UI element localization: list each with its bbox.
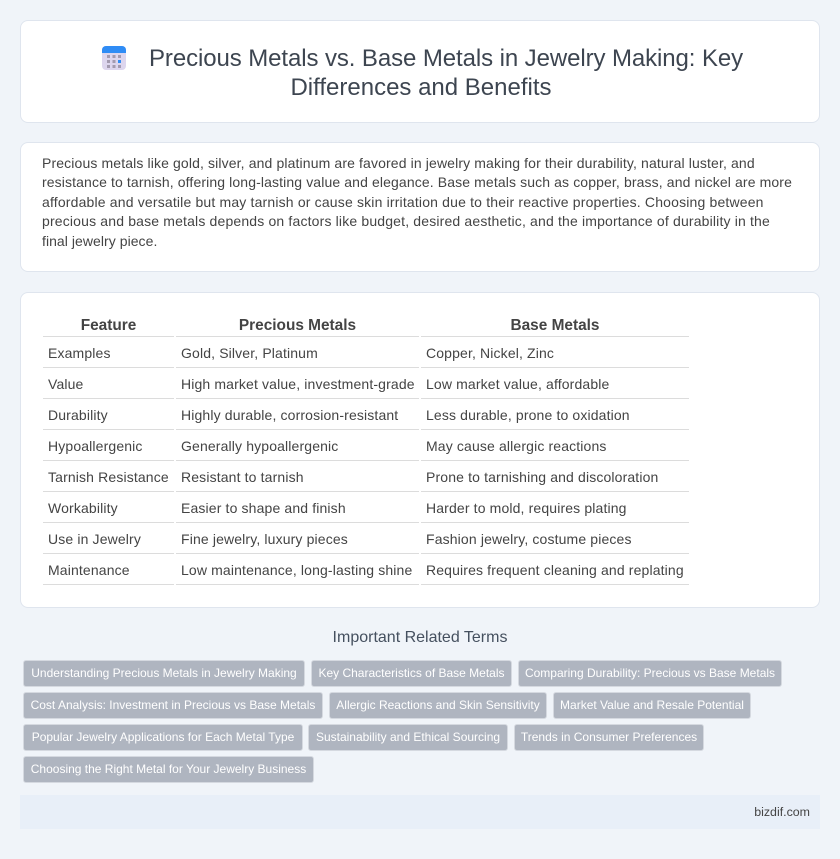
text block: introduction: affordable and versatile but may tarnish or cause skin irritation due to their reactive properties. Choosing between — [42, 194, 764, 210]
table: feature comparison: Fashion jewelry, costume pieces — [426, 531, 632, 547]
table: feature comparison: Less durable, prone to oxidation — [426, 407, 630, 423]
table: feature comparison: Use in Jewelry — [48, 531, 141, 547]
table: feature comparison: Durability — [48, 407, 108, 423]
text block: introduction: Precious metals like gold, silver, and platinum are favored in jewelry making for their durability, natural luster, and — [42, 155, 755, 171]
table: feature comparison: Workability — [48, 500, 118, 516]
table: feature comparison: Resistant to tarnish — [181, 469, 304, 485]
table: feature comparison: Generally hypoallergenic — [181, 438, 338, 454]
table: feature comparison: May cause allergic reactions — [426, 438, 607, 454]
tags: related terms: Popular Jewelry Applications for Each Metal Type — [32, 730, 294, 744]
text block: introduction: precious and base metals depends on factors like budget, desired aesthetic, and the importance of durability in the — [42, 213, 770, 229]
table: feature comparison: Low market value, affordable — [426, 376, 609, 392]
table: feature comparison: Maintenance — [48, 562, 130, 578]
tags: related terms: Comparing Durability: Precious vs Base Metals — [525, 666, 775, 680]
table: feature comparison: Feature — [81, 317, 136, 334]
icon: calendar — [102, 46, 126, 70]
table: feature comparison: Precious Metals — [239, 317, 356, 334]
title: Differences and Benefits — [290, 74, 552, 101]
tags: related terms — [23, 660, 782, 783]
title — [149, 45, 743, 101]
panel: title card — [20, 20, 820, 123]
table: feature comparison — [43, 317, 689, 585]
table: feature comparison: Highly durable, corrosion-resistant — [181, 407, 398, 423]
table: feature comparison: Easier to shape and finish — [181, 500, 346, 516]
table: feature comparison: Copper, Nickel, Zinc — [426, 345, 554, 361]
tags: related terms: Market Value and Resale Potential — [560, 698, 744, 712]
table: feature comparison: Value — [48, 376, 83, 392]
table: feature comparison: Base Metals — [510, 317, 599, 334]
table: feature comparison: Harder to mold, requires plating — [426, 500, 627, 516]
table: feature comparison: Tarnish Resistance — [48, 469, 169, 485]
table: feature comparison: Prone to tarnishing and discoloration — [426, 469, 658, 485]
panel: introduction — [20, 142, 820, 272]
text block: introduction: resistance to tarnish, offering long-lasting value and elegance. Base metals such as copper, brass, and nickel are more — [42, 174, 792, 190]
footer: site name: bizdif.com — [754, 805, 810, 819]
text block: introduction: final jewelry piece. — [42, 233, 157, 249]
tags: related terms: Choosing the Right Metal for Your Jewelry Business — [31, 762, 306, 776]
tags: related terms: Cost Analysis: Investment in Precious vs Base Metals — [31, 698, 315, 712]
tags: related terms: Trends in Consumer Preferences — [521, 730, 697, 744]
tags: related terms: Allergic Reactions and Skin Sensitivity — [336, 698, 540, 712]
table: feature comparison: Fine jewelry, luxury pieces — [181, 531, 348, 547]
tags: related terms: Understanding Precious Metals in Jewelry Making — [31, 666, 297, 680]
text block: introduction — [42, 155, 792, 249]
table: feature comparison: Examples — [48, 345, 111, 361]
table: feature comparison: Hypoallergenic — [48, 438, 143, 454]
footer — [20, 795, 820, 829]
title: Precious Metals vs. Base Metals in Jewelry Making: Key — [149, 45, 743, 72]
table: feature comparison: Requires frequent cleaning and replating — [426, 562, 684, 578]
heading: related terms: Important Related Terms — [333, 629, 507, 646]
table: feature comparison: Low maintenance, long-lasting shine — [181, 562, 412, 578]
tags: related terms: Key Characteristics of Base Metals — [318, 666, 505, 680]
tags: related terms: Sustainability and Ethical Sourcing — [316, 730, 500, 744]
table: feature comparison: High market value, investment-grade — [181, 376, 415, 392]
panel: comparison table — [20, 292, 820, 608]
table: feature comparison: Gold, Silver, Platinum — [181, 345, 318, 361]
